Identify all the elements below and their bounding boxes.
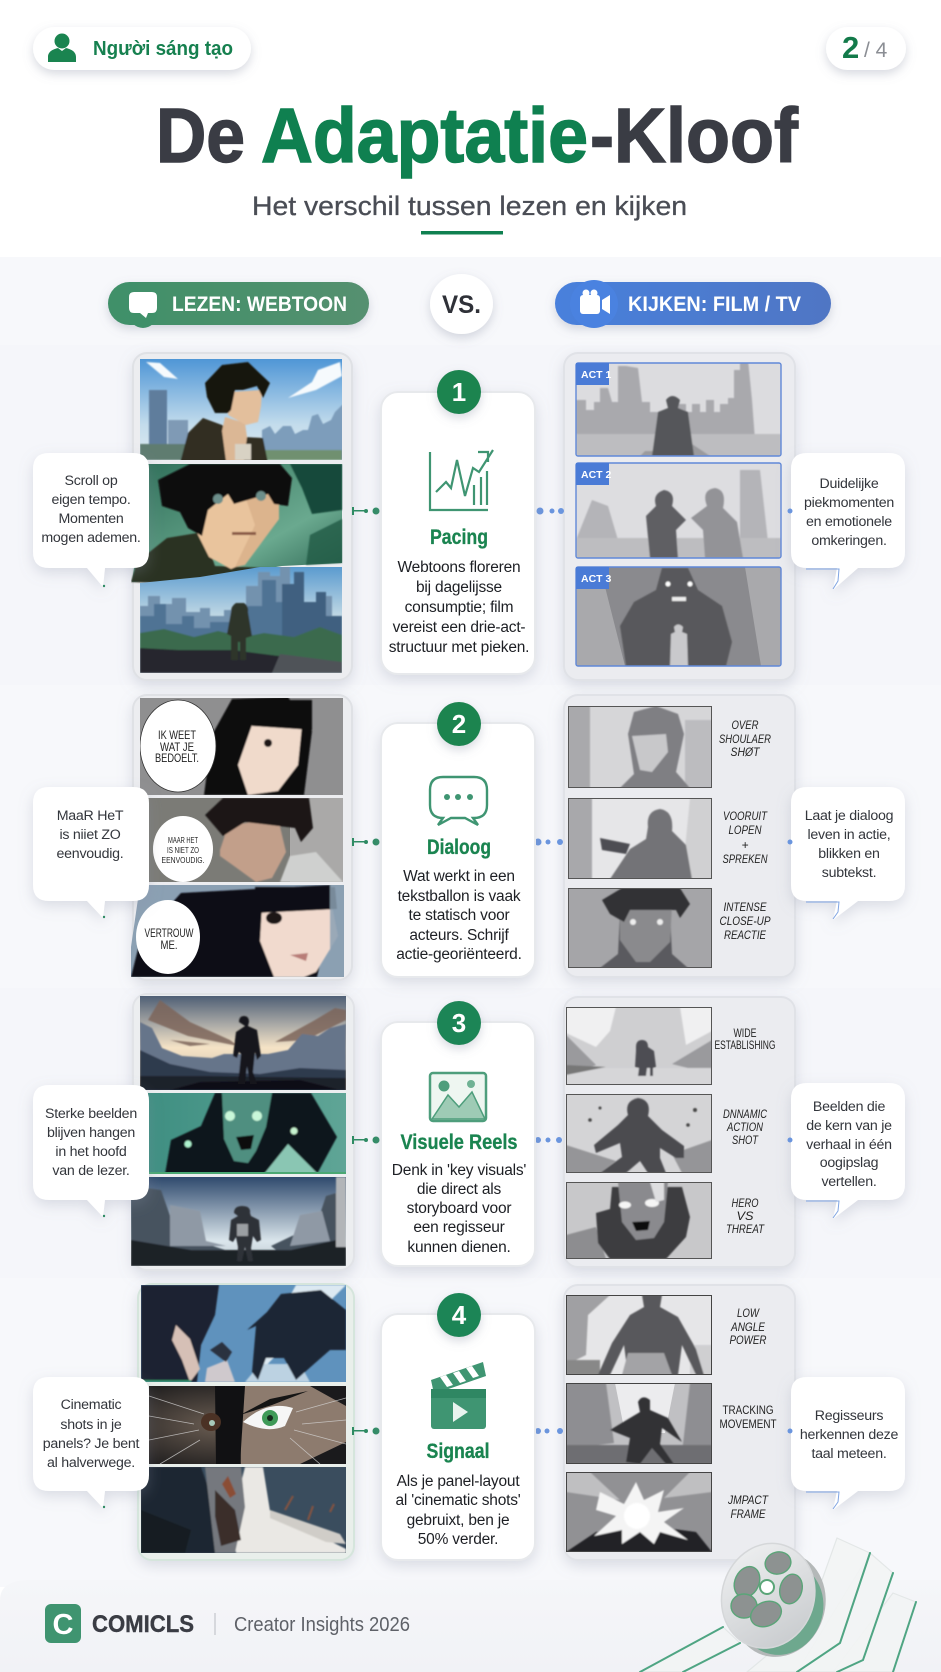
shot label: ACTION [726,1120,763,1134]
callout: right: blikken en [818,846,880,862]
callout: left [33,453,149,587]
speech text: BEDOELT. [155,751,199,765]
column header: lezen [108,282,369,328]
connector right [534,838,563,846]
shot label: WIDE [734,1026,756,1040]
storyboard: impact frame [566,1472,712,1552]
shot label: CLOSE-UP [720,914,770,928]
shot label [722,809,768,866]
callout: left: is niiet ZO [59,827,121,843]
connector right [535,1428,563,1434]
callout: right [788,1083,905,1219]
page counter pill: / 4 [864,39,888,62]
column header: kijken [555,280,831,328]
title underline [421,231,503,234]
icon: film reel [707,1531,841,1669]
card heading: Pacing [430,526,488,549]
callout: left: al halverwege. [47,1455,135,1471]
card body: Denk in 'key visuals' [392,1162,526,1179]
shot label: SHØT [730,745,761,759]
shot label [730,1306,767,1347]
callout: right: omkeringen. [811,533,887,549]
callout: right: subtekst. [822,865,876,881]
shot label: HERO [732,1196,758,1210]
card body: consumptie; film [405,599,513,616]
card: dialoog [381,702,535,977]
glass strip edges [640,1553,916,1672]
callout: left [33,1085,149,1217]
speech text [162,835,204,865]
storyboard: over shoulder [568,706,712,788]
card body [395,1473,521,1548]
row 2: dialoog [33,695,905,980]
callout: right [788,453,905,590]
shot label: LOPEN [728,823,762,837]
callout: left: in het hoofd [55,1144,127,1160]
shot label: TRACKING [722,1403,774,1417]
storyboard: close-up [568,888,712,968]
panel: storyboard strip 1 [564,353,795,680]
glass strips [640,1538,916,1672]
title [156,93,798,179]
card heading: Signaal [426,1440,490,1463]
card heading: Visuele Reels [400,1131,518,1154]
logo [45,1604,81,1643]
act tag [576,567,611,589]
shot label: FRAME [730,1507,766,1521]
speech text: WAT JE [160,740,194,754]
card body: Als je panel-layout [397,1473,520,1490]
panel: webtoon strip 3 [131,994,354,1270]
icon: camera [580,290,610,314]
speech text: IS NIET ZO [167,845,199,855]
shot label: + [741,838,749,852]
card body: vereist een drie-act- [393,619,525,636]
footer brand: Creator Insights 2026 [234,1614,410,1636]
card body: kunnen dienen. [407,1239,511,1256]
shot label [720,1403,777,1431]
callout: left: Momenten [58,511,124,527]
callout: right: Regisseurs [815,1408,883,1424]
webtoon panel: impact streaks [141,1467,346,1553]
logo: C [53,1609,74,1641]
act tag: ACT 2 [581,469,611,481]
callout: right: vertellen. [821,1174,877,1190]
shot label [714,1026,776,1052]
icon: rising chart [430,450,493,510]
connector right [535,1137,562,1143]
card body: te statisch voor [408,907,510,924]
vs badge: VS. [442,291,481,319]
card body: die direct als [417,1181,502,1198]
panel: webtoon strip 1 [131,353,352,680]
icon: landscape picture [430,1073,486,1121]
row 4: signaal [33,1284,905,1560]
callout: left: eigen tempo. [51,492,131,508]
card body [389,559,529,656]
shot label: LOW [737,1306,760,1320]
number badge: 1 [452,377,466,407]
number badge: 2 [452,709,466,739]
shot label: REACTIE [724,928,767,942]
act tag [576,363,611,385]
callout: right [788,1377,905,1510]
shot label [719,718,771,759]
callout: left [33,1377,149,1508]
act tag: ACT 1 [581,369,611,381]
shot label: JMPACT [727,1493,769,1507]
shot label: DNNAMIC [723,1107,767,1121]
callout: left: mogen ademen. [41,530,141,546]
footer band [0,1580,941,1672]
speech text [155,728,199,765]
icon: clapperboard [431,1362,486,1429]
shot label [726,1196,765,1236]
number badge [437,370,481,414]
storyboard: tracking [566,1383,712,1464]
page counter pill [826,27,906,70]
page counter pill: 2 [842,30,859,65]
storyboard: walking and talking [568,798,712,879]
shot label [723,1107,767,1147]
panel: storyboard strip 2 [564,695,795,977]
shot label: INTENSE [724,900,767,914]
number badge: 3 [452,1008,466,1038]
callout: left: Cinematic [61,1397,122,1413]
card: pacing [381,370,535,674]
title: -Kloof [590,93,798,179]
act tag [576,463,611,485]
row 3: visuele reels [33,994,905,1270]
shot label: POWER [730,1333,767,1347]
card body: Webtoons floreren [398,559,520,576]
webtoon panel: girl two [131,885,344,977]
storyboard: low angle [566,1295,712,1375]
callout: right: leven in actie, [807,827,891,843]
storyboard: act 3 [576,567,781,666]
shot label: ESTABLISHING [714,1038,776,1052]
callout: right: en emotionele [806,514,892,530]
webtoon panel: rocks and titan [141,1285,346,1382]
row 1: pacing [33,353,905,680]
callout: left: panels? Je bent [43,1436,140,1452]
footer brand [45,1604,410,1643]
category pill [33,27,251,70]
callout: right: verhaal in één [806,1137,892,1153]
connector left [352,507,380,515]
webtoon panel: boy and skyline [140,359,342,460]
column header: kijken: KIJKEN: FILM / TV [628,293,801,316]
speech text [144,926,194,952]
category pill: Người sáng tạo [93,38,233,60]
number badge [437,1293,481,1337]
panel: webtoon strip 4 [138,1284,354,1560]
shot label: VOORUIT [723,809,768,823]
storyboard: hero vs threat [566,1182,712,1259]
connector left [352,838,380,846]
title: Adaptatie [261,93,588,179]
card body: acteurs. Schrijf [409,927,510,944]
shot label [727,1493,769,1521]
card: visuele reels [381,1001,535,1266]
storyboard: act 2 [576,463,781,560]
title: De [156,93,245,179]
shot label: THREAT [726,1222,765,1236]
callout: left: van de lezer. [52,1163,130,1179]
callout: right: Beelden die [813,1099,885,1115]
shot label: ANGLE [730,1320,766,1334]
speech text: EENVOUDIG. [162,855,204,865]
storyboard: act 1 [576,360,781,456]
callout: left: Sterke beelden [45,1106,137,1122]
panel: webtoon strip 2 [131,695,352,980]
callout: left: Scroll op [65,473,118,489]
webtoon panel: monster [148,1093,346,1174]
number badge [437,702,481,746]
speech text: MAAR HET [168,835,198,845]
connector right [536,508,564,514]
number badge [437,1001,481,1045]
storyboard: wide establishing [566,1007,712,1085]
connector left [352,1136,380,1144]
webtoon panel: figure in ruins [131,1177,346,1266]
callout: right: de kern van je [806,1118,892,1134]
column header: lezen: LEZEN: WEBTOON [172,293,347,316]
act tag: ACT 3 [581,573,611,585]
card body: structuur met pieken. [389,639,529,656]
shot label: OVER [732,718,759,732]
card body: gebruixt, ben je [407,1512,509,1529]
shot label: MOVEMENT [720,1417,777,1431]
callout: right: piekmomenten [804,495,894,511]
card body: storyboard voor [407,1200,511,1217]
webtoon panel: boy closeup [131,464,343,584]
subtitle: Het verschil tussen lezen en kijken [252,191,687,221]
card body: Wat werkt in een [403,868,515,885]
shot label: SPREKEN [722,852,768,866]
icon: speech balloon [430,777,487,825]
card body: tekstballon is vaak [398,888,521,905]
shot label: VS [736,1209,754,1223]
callout: right: taal meteen. [811,1446,887,1462]
storyboard: dynamic action [566,1094,712,1173]
icon: chat bubble [129,292,157,318]
number badge: 4 [452,1300,467,1330]
callout: left [33,787,149,918]
card body [396,868,522,963]
shot label: SHOT [732,1133,759,1147]
webtoon panel: boy [148,798,343,882]
card body [392,1162,526,1256]
shot label [720,900,770,942]
callout: right: Laat je dialoog [805,808,893,824]
speech text: ME. [160,938,178,952]
callout: left: eenvoudig. [57,846,123,862]
webtoon panel: girl one [140,698,343,795]
card: signaal [381,1293,535,1560]
vs badge [430,274,493,334]
decoration: glass strips and film reel [640,1531,916,1672]
webtoon panel: eye closeup [149,1386,346,1464]
callout: left: shots in je [60,1417,122,1433]
card body: actie-georiënteerd. [396,946,522,963]
callout: right: Duidelijke [819,476,879,492]
icon: person [48,34,76,62]
shot label: SHOULAER [719,732,771,746]
connector left [352,1427,380,1435]
callout: right [788,787,905,920]
panel: storyboard strip 4 [564,1285,795,1560]
callout: right: oogipslag [820,1155,878,1171]
webtoon panel: figure facing city [140,567,342,673]
card body: bij dagelijsse [416,579,502,596]
speech text: IK WEET [158,728,197,742]
panel: storyboard strip 3 [564,997,795,1267]
callout: right: herkennen deze [800,1427,898,1443]
callout: left: MaaR HeT [57,808,124,824]
card body: een regisseur [413,1219,505,1236]
card body: al 'cinematic shots' [395,1492,521,1509]
card heading: Dialoog [427,836,491,859]
webtoon panel: sunset figure [140,996,346,1090]
speech text: VERTROUW [144,926,194,940]
card body: 50% verder. [418,1531,498,1548]
callout: left: blijven hangen [47,1125,135,1141]
footer brand: COMICLS [92,1611,194,1638]
